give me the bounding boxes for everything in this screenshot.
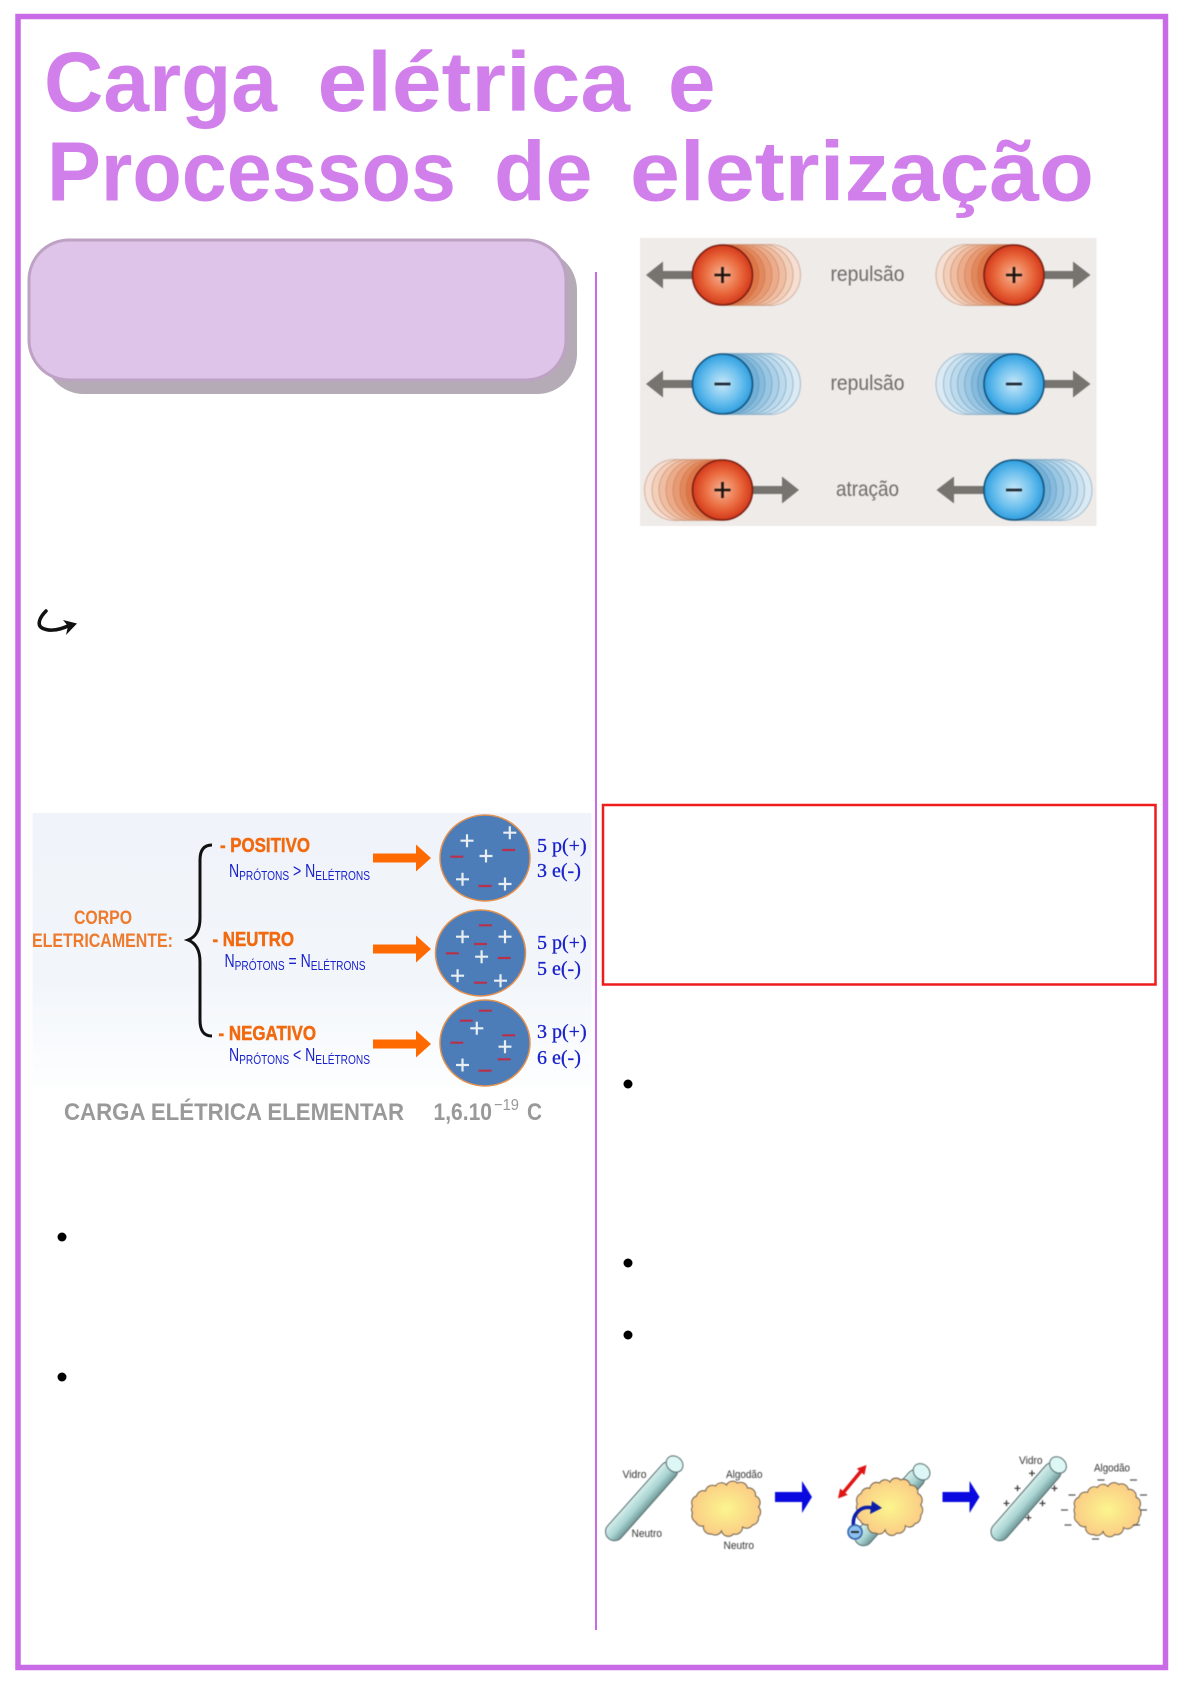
row: neutro: = N (285, 951, 311, 971)
row: positive repulsion (646, 244, 1090, 306)
row: positivo: 3 e(-) (537, 860, 581, 882)
step 3: charged rod and cotton: Algodão (1094, 1462, 1130, 1474)
row: neutro (212, 910, 587, 996)
row: neutro: - NEUTRO (212, 929, 294, 951)
bullet list: right column (624, 1080, 632, 1340)
diagram: charge repulsion and attraction (640, 238, 1096, 526)
title: Processos (47, 124, 456, 218)
row: positivo: N (229, 861, 242, 881)
row: neutro: 5 p(+) (537, 932, 587, 954)
row: negativo: PRÓTONS (239, 1052, 289, 1067)
caption: elementary charge: CARGA ELÉTRICA ELEMENTAR (64, 1098, 404, 1126)
row: attraction: atração (836, 478, 899, 501)
column divider (595, 272, 597, 1630)
row: negativo: 3 p(+) (537, 1021, 587, 1043)
caption: elementary charge: −19 (494, 1097, 519, 1114)
row: attraction (644, 460, 1092, 520)
title: de (494, 124, 592, 218)
label: corpo eletricamente: ELETRICAMENTE: (32, 931, 173, 952)
row: positivo: > N (289, 861, 315, 881)
diagram: electrically charged bodies (32, 813, 592, 1089)
caption: elementary charge: C (527, 1099, 542, 1126)
row: negativo: < N (289, 1045, 315, 1065)
row: neutro: N (224, 951, 238, 971)
title (44, 35, 1094, 218)
step 1: neutral glass rod and cotton: Algodão (726, 1469, 762, 1481)
title: Carga (44, 35, 278, 129)
label: corpo eletricamente: CORPO (74, 908, 132, 929)
step 1: neutral glass rod and cotton (602, 1452, 762, 1552)
step 3: charged rod and cotton: Vidro (1019, 1455, 1042, 1467)
row: positive repulsion: repulsão (830, 263, 904, 286)
icon: curved arrow (39, 611, 77, 635)
step 3: charged rod and cotton (987, 1453, 1147, 1544)
title: elétrica (318, 35, 631, 129)
row: negativo: N (229, 1045, 242, 1065)
row: positivo (220, 815, 587, 901)
title: e (668, 35, 716, 129)
brace (188, 845, 212, 1036)
step 1: neutral glass rod and cotton: Neutro (632, 1528, 662, 1540)
row: neutro: ELÉTRONS (311, 958, 366, 973)
row: positivo: PRÓTONS (239, 868, 289, 883)
step 2: rubbing (838, 1460, 933, 1549)
label: corpo eletricamente (32, 908, 173, 952)
arrow: step 2 to 3 (942, 1481, 980, 1513)
row: negativo: 6 e(-) (537, 1047, 581, 1069)
step 1: neutral glass rod and cotton: Vidro (622, 1469, 646, 1481)
title: eletrização (630, 124, 1094, 218)
row: positivo: - POSITIVO (220, 835, 310, 857)
row: negativo (218, 1000, 587, 1086)
step 1: neutral glass rod and cotton: Neutro (724, 1540, 754, 1552)
panel: rounded heading box (29, 240, 577, 394)
bullet list: left column (58, 1232, 66, 1382)
row: positivo: ELÉTRONS (315, 868, 370, 883)
callout: red outlined box (603, 805, 1156, 984)
row: neutro: 5 e(-) (537, 958, 581, 980)
row: negativo: - NEGATIVO (218, 1023, 316, 1045)
caption: elementary charge: 1,6.10 (434, 1099, 492, 1126)
diagram: electrification by friction (602, 1452, 1147, 1552)
row: negative repulsion: repulsão (830, 372, 904, 395)
row: negativo: ELÉTRONS (315, 1052, 370, 1067)
arrow: step 1 to 2 (775, 1481, 812, 1513)
row: negative repulsion (646, 354, 1090, 414)
row: positivo: 5 p(+) (537, 835, 587, 857)
row: neutro: PRÓTONS (235, 958, 285, 973)
